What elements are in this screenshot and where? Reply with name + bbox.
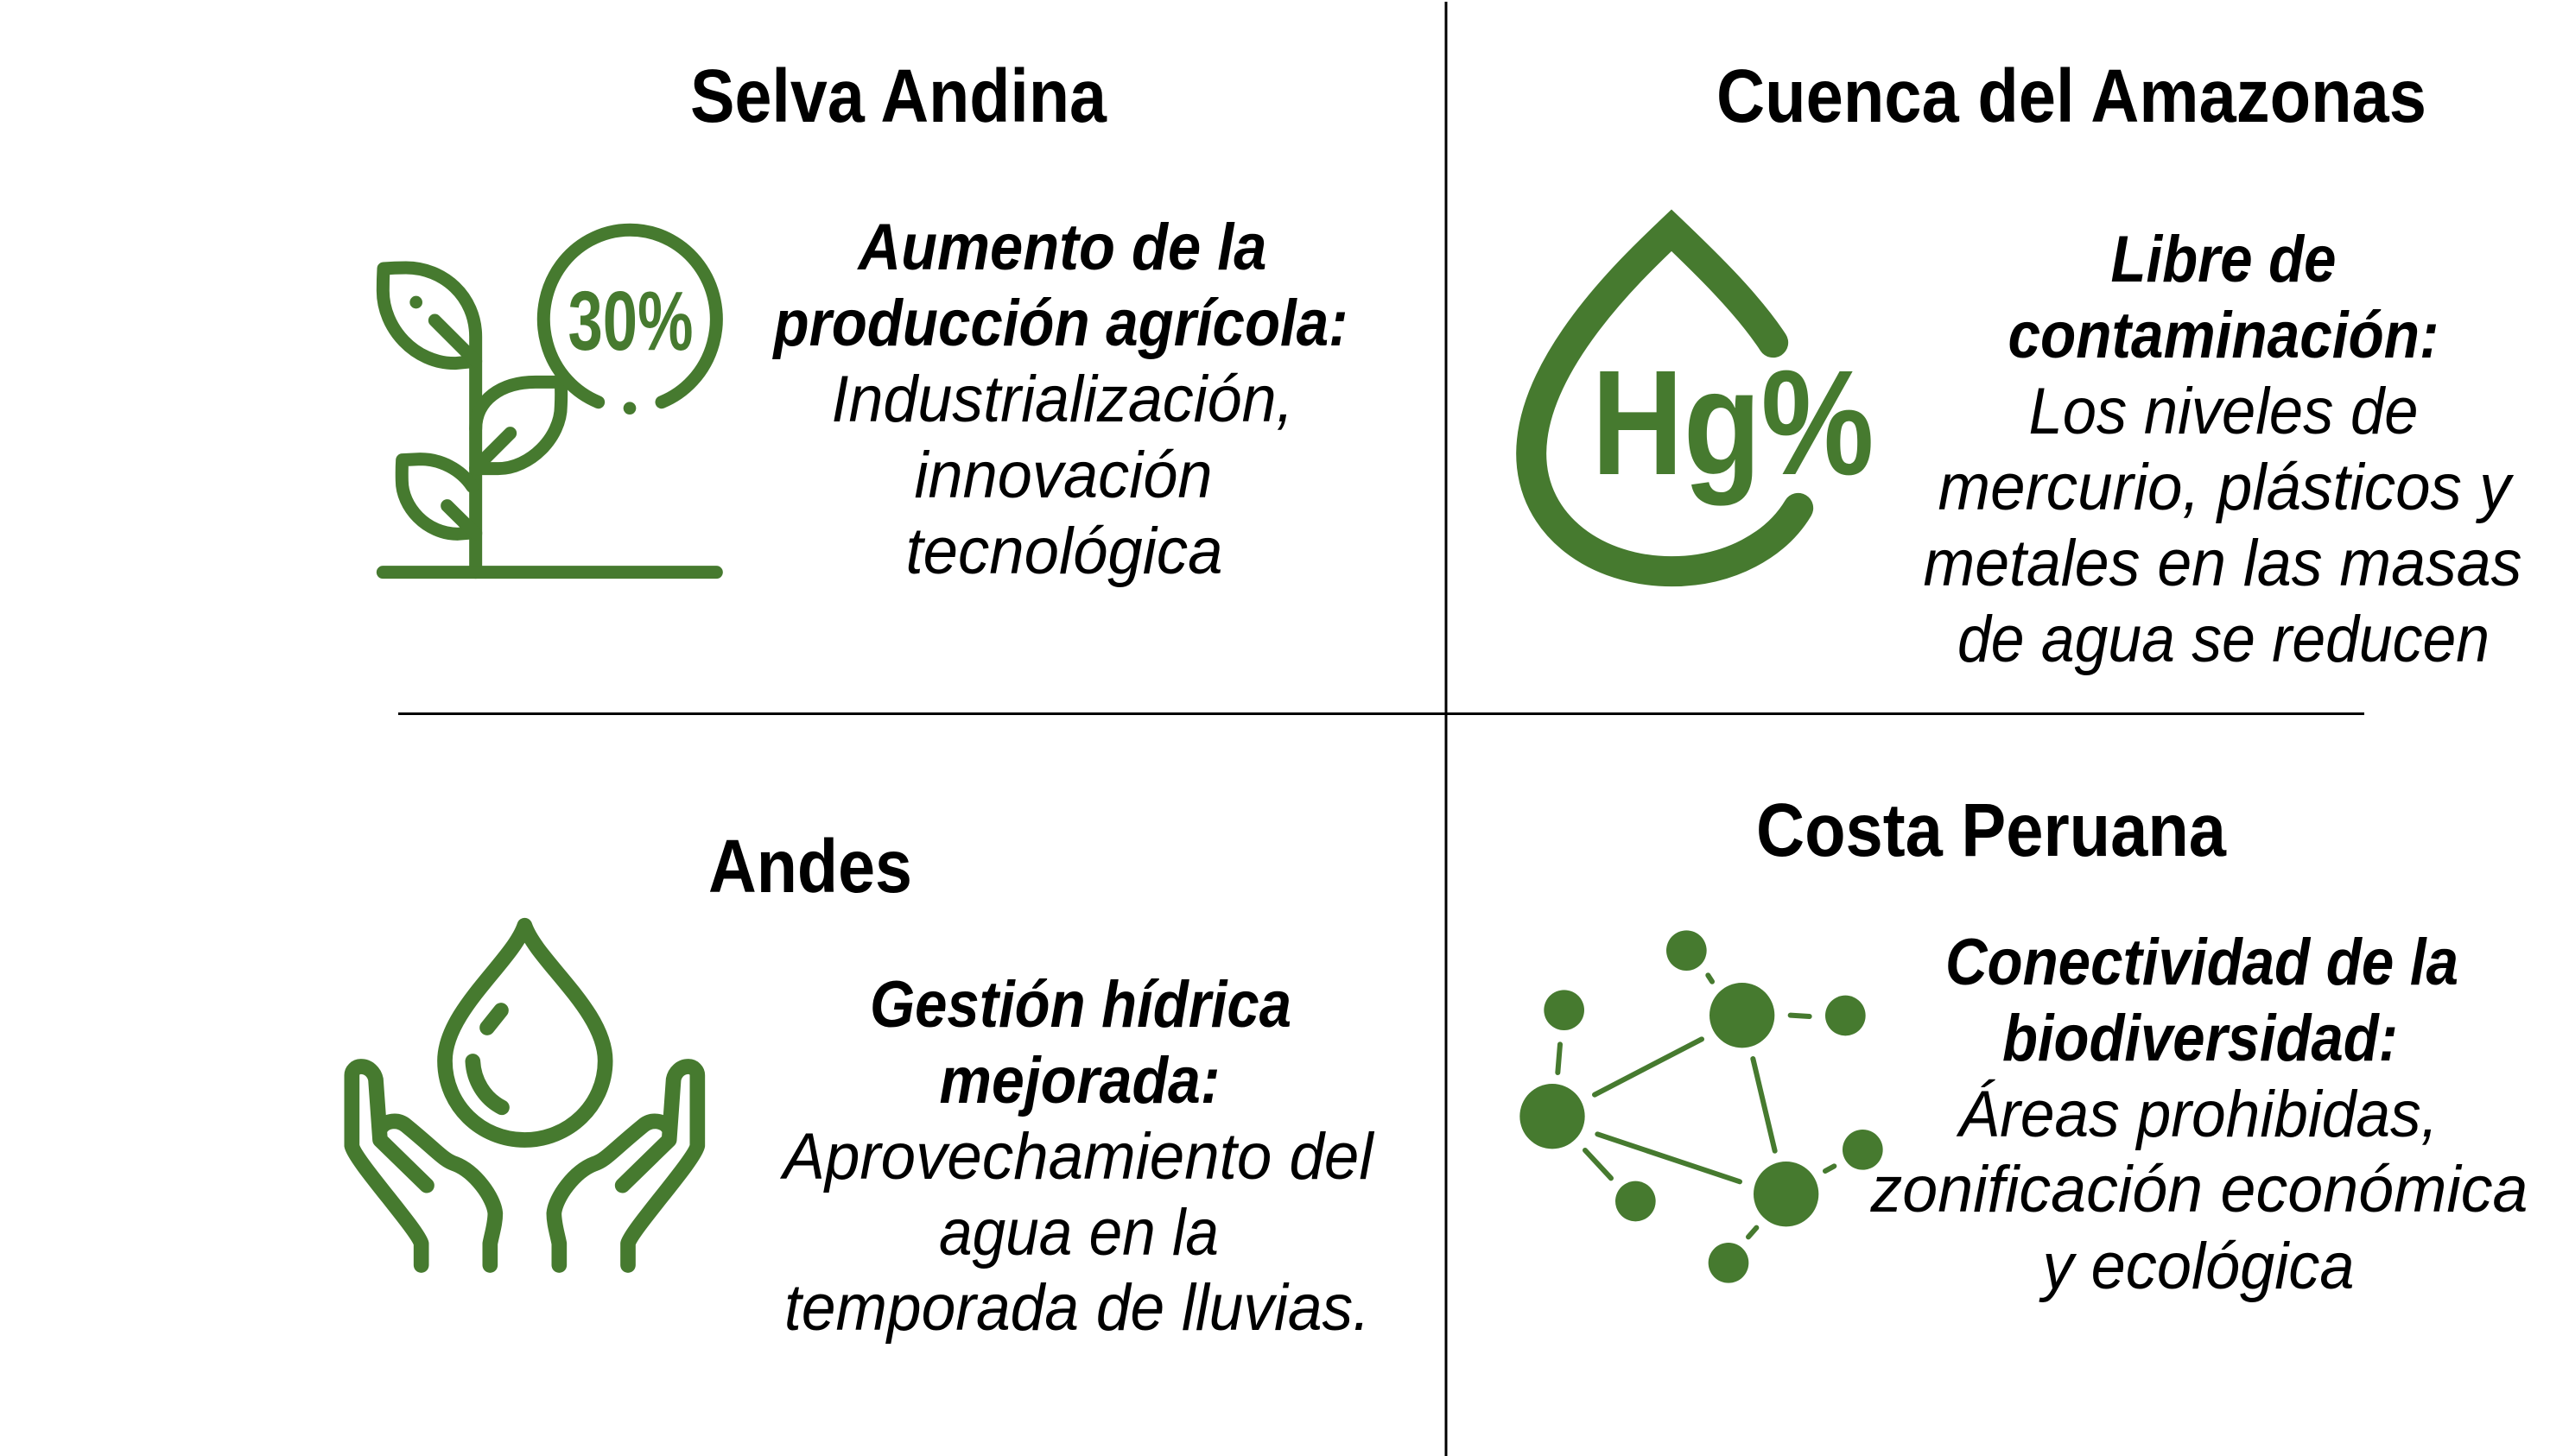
text block: Andes description: temporada de lluvias. <box>784 1271 1370 1345</box>
heading: Costa Peruana: Costa Peruana <box>1756 788 2227 872</box>
text block: Selva Andina description <box>772 211 1348 588</box>
text block: Andes description: Gestión hídrica <box>870 968 1291 1041</box>
panel: Andes <box>352 825 1375 1345</box>
icon label: 30%: 30% <box>568 274 693 368</box>
text block: Cuenca del Amazonas description: metales en las masas <box>1923 527 2522 600</box>
icon: hands holding water drop <box>352 926 697 1265</box>
text block: Cuenca del Amazonas description: de agua se reducen <box>1957 603 2490 676</box>
text block: Costa Peruana description: Áreas prohibidas, <box>1956 1078 2438 1151</box>
text block: Andes description: agua en la <box>939 1196 1219 1269</box>
panel: Cuenca del Amazonas <box>1532 54 2522 676</box>
text block: Selva Andina description: Industrialización, <box>831 363 1294 436</box>
heading: Selva Andina: Selva Andina <box>690 54 1107 138</box>
text block: Costa Peruana description: biodiversidad: <box>2002 1002 2398 1075</box>
icon: water drop outline <box>1532 231 1798 572</box>
icon label: Hg%: Hg% <box>1591 339 1874 506</box>
text block: Selva Andina description: tecnológica <box>905 515 1223 588</box>
panel: Costa Peruana <box>1519 788 2528 1303</box>
icon: plant with 30% bubble <box>383 230 716 573</box>
text block: Cuenca del Amazonas description: Los niveles de <box>2028 375 2419 448</box>
text block: Andes description: Aprovechamiento del <box>780 1120 1375 1193</box>
text block: Selva Andina description: Aumento de la <box>857 211 1266 284</box>
heading: Andes: Andes <box>708 825 912 908</box>
heading: Cuenca del Amazonas: Cuenca del Amazonas <box>1716 54 2426 138</box>
panel: Selva Andina <box>383 54 1348 588</box>
text block: Costa Peruana description: zonificación económica <box>1870 1153 2528 1226</box>
text block: Andes description: mejorada: <box>940 1044 1220 1117</box>
icon: biodiversity network <box>1519 930 1883 1283</box>
text block: Andes description <box>780 968 1375 1345</box>
text block: Cuenca del Amazonas description <box>1923 223 2522 676</box>
text block: Selva Andina description: producción agrícola: <box>772 287 1348 360</box>
text block: Costa Peruana description: Conectividad de la <box>1945 926 2458 999</box>
text block: Costa Peruana description <box>1870 926 2528 1303</box>
text block: Costa Peruana description: y ecológica <box>2039 1230 2355 1303</box>
text block: Cuenca del Amazonas description: mercurio, plásticos y <box>1938 451 2514 524</box>
text block: Cuenca del Amazonas description: Libre de <box>2111 223 2336 296</box>
text block: Selva Andina description: innovación <box>914 439 1213 512</box>
text block: Cuenca del Amazonas description: contaminación: <box>2008 299 2439 372</box>
